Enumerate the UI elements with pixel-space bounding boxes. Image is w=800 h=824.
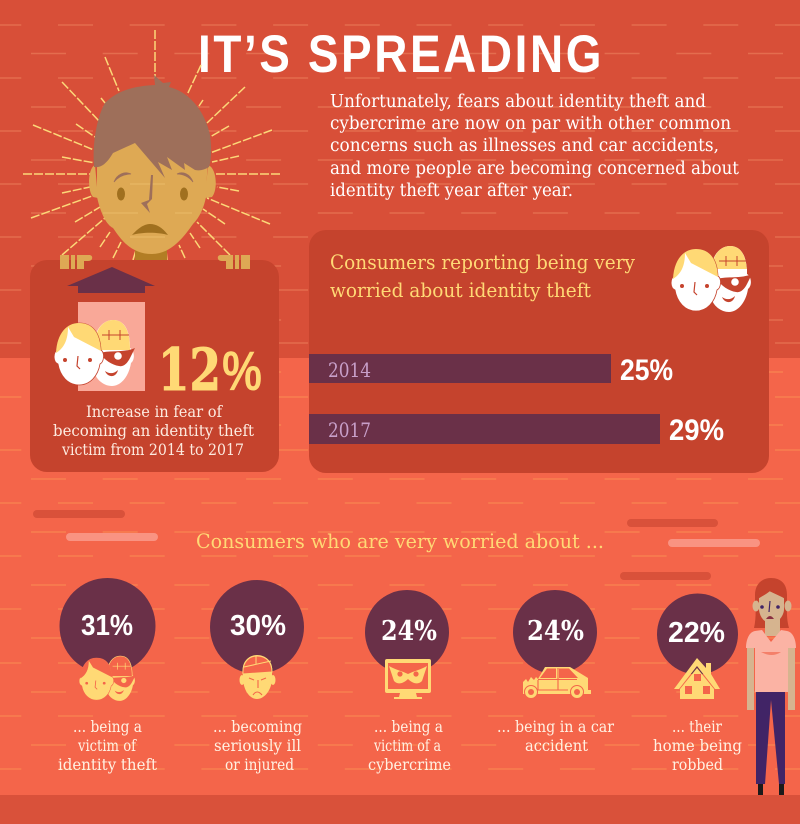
panel caption: Increase in fear of bbox=[86, 403, 223, 421]
icon: bandaged sad face bbox=[240, 655, 276, 699]
stat: home robbed 22% bbox=[653, 594, 742, 774]
panel caption bbox=[53, 403, 255, 459]
icon: monitor with mask bbox=[385, 659, 431, 699]
background: bottom strip bbox=[0, 795, 800, 824]
caption: robbed bbox=[672, 756, 723, 774]
stat: cybercrime 24% bbox=[365, 590, 451, 774]
intro text block: and more people are becoming concerned about bbox=[330, 159, 739, 179]
bar 2017: 2017 bbox=[328, 418, 371, 442]
intro text block: identity theft year after year. bbox=[330, 181, 573, 201]
stat: car accident 24% bbox=[497, 590, 615, 755]
caption: victim of a bbox=[373, 737, 441, 755]
intro text block: concerns such as illnesses and car accidents, bbox=[330, 136, 719, 156]
caption: ... being a bbox=[374, 718, 443, 736]
bar 2014: 25% bbox=[620, 354, 673, 387]
caption: ... being a bbox=[73, 718, 142, 736]
panel caption: victim from 2014 to 2017 bbox=[61, 441, 244, 459]
caption: or injured bbox=[225, 756, 294, 774]
panel heading: worried about identity theft bbox=[330, 279, 591, 302]
caption bbox=[497, 718, 615, 755]
section heading: Consumers who are very worried about ... bbox=[196, 530, 604, 553]
panel heading: Consumers reporting being very bbox=[330, 251, 635, 274]
icon: victim and thief faces bbox=[671, 246, 752, 312]
stat: seriously ill 30%: 30% bbox=[230, 610, 286, 642]
caption: cybercrime bbox=[368, 756, 451, 774]
caption: victim of bbox=[77, 737, 137, 755]
icon: right hand gripping the panel bbox=[218, 255, 250, 269]
bar 2017: 29% bbox=[669, 414, 724, 447]
panel caption: becoming an identity theft bbox=[53, 422, 255, 440]
caption: ... their bbox=[672, 718, 723, 736]
stat: car accident 24%: 24% bbox=[527, 616, 584, 647]
caption bbox=[213, 718, 302, 774]
12 percent figure: % bbox=[222, 339, 262, 402]
intro text block: Unfortunately, fears about identity theft and bbox=[330, 92, 706, 112]
stat: cybercrime 24%: 24% bbox=[381, 616, 437, 647]
caption bbox=[653, 718, 742, 774]
stat: identity theft 31%: 31% bbox=[81, 610, 133, 642]
caption: ... becoming bbox=[213, 718, 302, 736]
12 percent figure: 12 bbox=[158, 336, 221, 404]
caption: identity theft bbox=[58, 756, 158, 774]
panel: increase in fear bbox=[30, 255, 279, 472]
background: upper band bbox=[0, 0, 800, 358]
intro text block: cybercrime are now on par with other common bbox=[330, 114, 731, 134]
stat: home robbed 22%: 22% bbox=[668, 617, 725, 649]
caption bbox=[368, 718, 451, 774]
icon: left hand gripping the panel bbox=[60, 255, 92, 269]
worried woman character bbox=[746, 578, 796, 795]
caption: home being bbox=[653, 737, 742, 755]
caption: accident bbox=[525, 737, 589, 755]
icon: victim and thief faces bbox=[79, 656, 136, 701]
bar 2014 bbox=[309, 354, 673, 387]
background: lower band bbox=[0, 358, 800, 824]
bar 2017 bbox=[309, 414, 724, 447]
arrow shaft bbox=[78, 302, 145, 391]
decorative floating bars bbox=[33, 510, 760, 580]
icon: crashed car bbox=[523, 667, 591, 698]
icon: victim and thief faces bbox=[54, 320, 135, 386]
bar 2014: 2014 bbox=[328, 358, 371, 382]
sunburst rays behind the head bbox=[23, 30, 280, 260]
stat: seriously ill 30% bbox=[210, 580, 304, 774]
caption: seriously ill bbox=[214, 737, 301, 755]
icon: house bbox=[674, 658, 720, 699]
panel heading bbox=[330, 251, 635, 302]
title: IT’S SPREADING bbox=[198, 25, 604, 84]
worried man character bbox=[89, 75, 216, 262]
stat: identity theft 31% bbox=[58, 578, 158, 774]
icon: up arrow bbox=[67, 267, 155, 293]
caption bbox=[58, 718, 158, 774]
panel: consumers very worried about identity theft bbox=[309, 230, 769, 473]
intro text block bbox=[330, 92, 739, 201]
caption: ... being in a car bbox=[497, 718, 615, 736]
